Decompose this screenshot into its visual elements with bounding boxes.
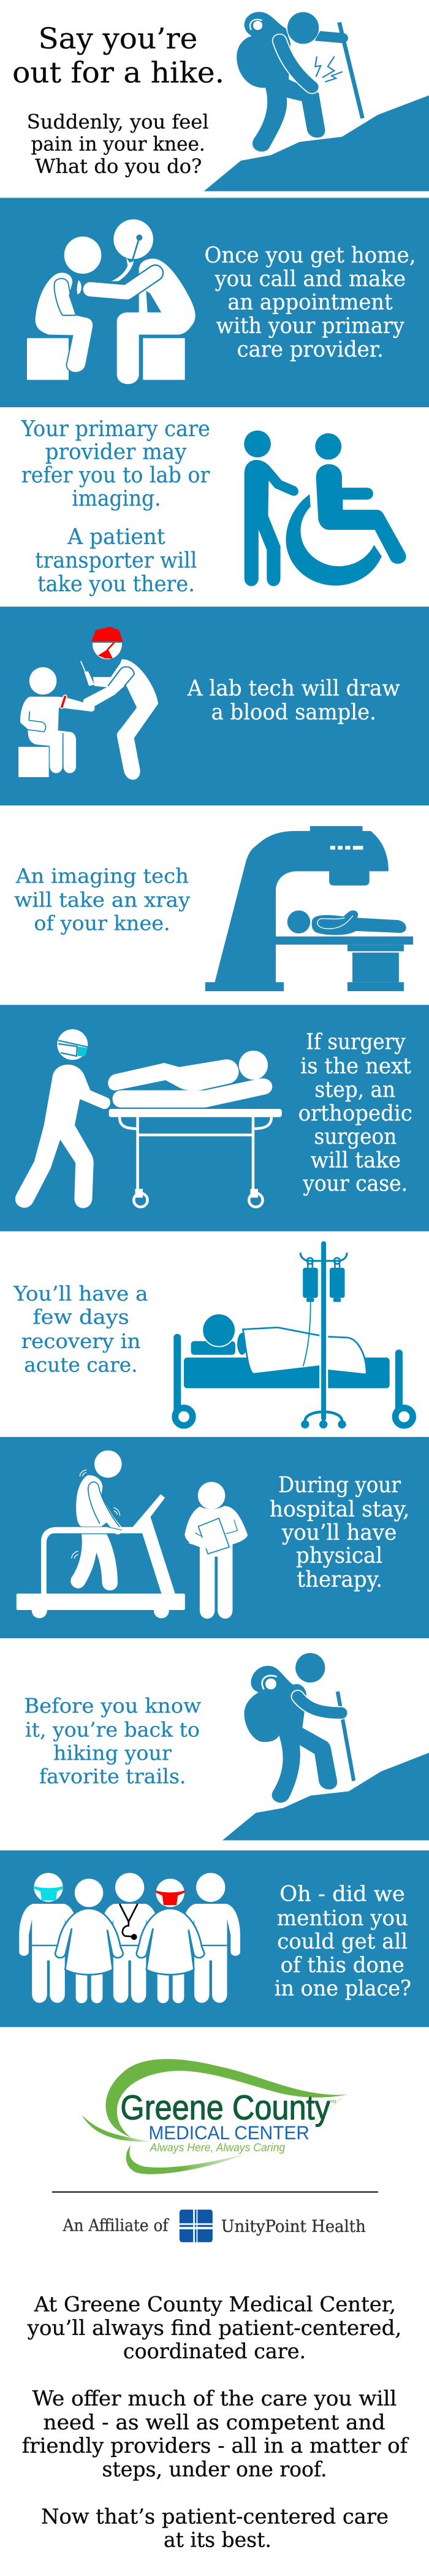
text: once you get home: you call and make [214,266,406,291]
text: physical therapy: During your [278,1473,401,1498]
text: imaging tech xray: of your knee. [34,911,170,935]
text: all of this done in one place: Oh - did we [279,1882,405,1907]
text: physical therapy: hospital stay, [270,1497,409,1522]
panel: out for a hike [12,12,429,191]
icon: hiker with knee pain on mountain [204,12,429,191]
text: once you get home: care provider. [237,337,384,362]
text: back to hiking favorite trails [24,1693,201,1788]
text: back to hiking favorite trails: hiking your [53,1741,172,1765]
icon: UnityPoint cross [180,2210,213,2242]
logo: Greene County Medical Center: TM [330,2100,336,2104]
text: physical therapy [270,1473,409,1592]
heading: say you're out for a hike: Say you’re [39,22,197,55]
affiliate line [63,2210,366,2242]
text: closing statement: Now that’s patient-centered care [41,2505,389,2529]
text: physical therapy: physical [296,1543,382,1568]
text: physical therapy: therapy. [297,1567,382,1592]
icon: transporter pushing wheelchair [244,431,406,586]
affiliate line: An Affiliate of [63,2215,169,2235]
text: all of this done in one place: of this done [281,1953,404,1978]
text: all of this done in one place: mention you [277,1906,408,1931]
text: care under one roof: steps, under one roof. [102,2458,327,2482]
panel: all in one place [0,1850,429,2027]
text: patient-centered coordinated care: coordinated care. [123,2339,306,2364]
text: physical therapy: you’ll have [281,1520,397,1545]
text: imaging tech xray [14,864,191,935]
text: sudden knee pain: Suddenly, you feel [27,110,209,133]
panel: imaging tech [14,826,413,991]
text: back to hiking favorite trails: it, you’re back to [25,1718,200,1742]
text: patient-centered coordinated care: At Greene County Medical Center, [34,2293,396,2317]
divider [52,2191,378,2193]
logo: Greene County Medical Center: MEDICAL CENTER [148,2123,309,2144]
text: once you get home: with your primary [216,313,404,339]
icon: patient on treadmill [17,1451,185,1618]
panel: back to hiking [24,1653,429,1840]
icon: healthy hiker on mountain [222,1653,429,1840]
text: sudden knee pain: pain in your knee. [31,133,205,155]
text: sudden knee pain [27,110,209,178]
panel: orthopedic surgeon [0,1005,429,1232]
text: surgery next step: is the next [300,1054,412,1079]
text: lab tech draws blood: a blood sample. [211,699,376,725]
text: surgery next step: will take [311,1148,401,1173]
text: back to hiking favorite trails: favorite trails. [39,1765,186,1788]
icon: therapist with clipboard [184,1482,248,1619]
text: recovery in acute care: few days [33,1305,129,1328]
heading: say you're out for a hike: out for a hike. [12,56,224,90]
text: all of this done in one place: in one place? [275,1977,411,2001]
icon: doctor examining patient [27,220,196,384]
text: back to hiking favorite trails: Before you know [24,1693,201,1717]
text: surgery next step: orthopedic [298,1101,412,1126]
logo: Greene County Medical Center: Always Here, Always Caring [150,2141,286,2154]
text: all of this done in one place [275,1882,411,2001]
text: surgery next step [298,1030,412,1197]
text: patient transporter: take you there. [37,571,195,596]
icon: lab tech drawing blood from seated patient [18,627,158,780]
text: surgery next step: surgeon [314,1124,397,1149]
text: care under one roof: need - as well as competent and [44,2410,385,2435]
panel: lab tech [0,607,429,805]
text: lab tech draws blood [187,675,400,725]
text: patient transporter [35,524,197,596]
text: care under one roof [22,2386,409,2482]
text: patient-centered coordinated care [27,2293,401,2364]
text: surgery next step: If surgery [306,1030,406,1055]
text: care under one roof: friendly providers - all in a matter of [22,2434,409,2458]
text: surgery next step: your case. [302,1171,408,1197]
icon: xray machine with patient [205,826,413,991]
text: all of this done in one place: could get all [277,1930,408,1954]
panel: primary care appointment [0,197,429,407]
text: patient-centered coordinated care: you’ll always find patient-centered, [27,2316,401,2340]
panel: footer [22,2059,409,2552]
text: referral to lab or imaging: refer you to lab or [21,462,210,488]
text: once you get home [204,242,416,362]
text: referral to lab or imaging: imaging. [72,486,161,511]
icon: care team of five [19,1873,240,2003]
panel: acute care recovery [13,1244,413,1428]
text: recovery in acute care [13,1282,148,1377]
panel: physical therapy [0,1437,429,1638]
text: lab tech draws blood: A lab tech will draw [187,675,400,701]
heading: say you're out for a hike [12,22,224,90]
text: surgery next step: step, an [314,1077,395,1102]
icon: surgeon pushing patient on gurney [15,1029,282,1208]
text: recovery in acute care: recovery in [21,1329,140,1353]
text: care under one roof: We offer much of the care you will [32,2386,397,2411]
text: referral to lab or imaging [21,416,210,511]
text: referral to lab or imaging: Your primary care [21,416,210,442]
text: referral to lab or imaging: provider may [45,439,187,464]
text: imaging tech xray: An imaging tech [15,864,189,887]
text: patient transporter: A patient [67,524,165,550]
text: sudden knee pain: What do you do? [35,155,202,178]
text: recovery in acute care: You’ll have a [13,1282,148,1306]
text: closing statement: at its best. [164,2528,271,2552]
logo: Greene County Medical Center [82,2059,347,2174]
icon: patient in hospital bed with IV [175,1244,413,1428]
text: imaging tech xray: will take an xray [14,888,191,912]
text: closing statement [41,2505,389,2552]
affiliate line: UnityPoint Health [221,2217,366,2236]
logo: Greene County Medical Center: Greene County [120,2088,330,2127]
text: patient transporter: transporter will [35,548,197,573]
panel: referral and patient transporter [21,416,406,596]
text: once you get home: an appointment [227,289,393,315]
text: recovery in acute care: acute care. [24,1353,138,1377]
